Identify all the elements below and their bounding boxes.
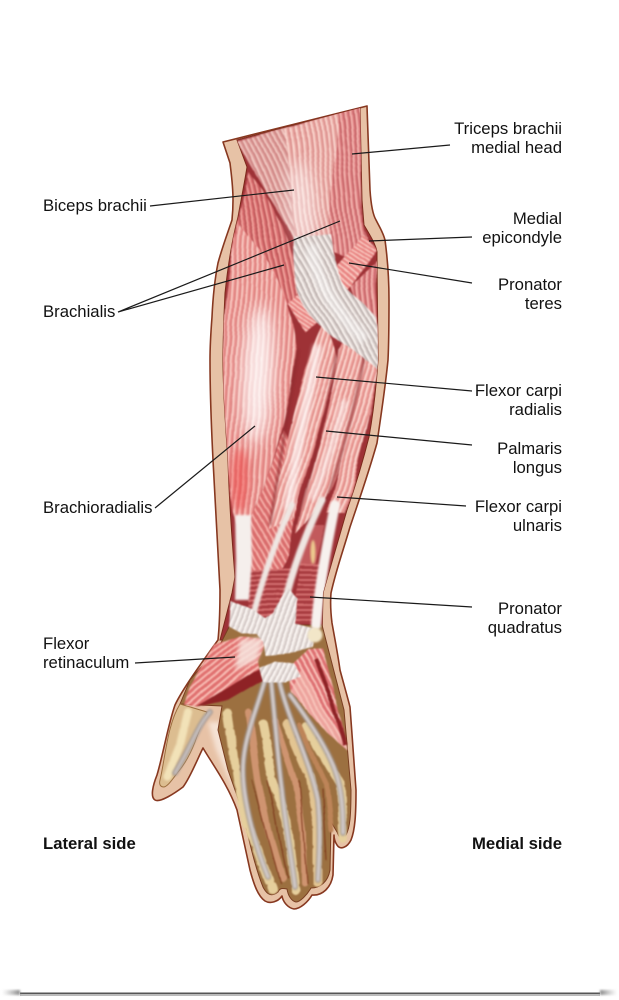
brachioradialis highlight [239,304,277,446]
muscle: flexor carpi radialis [268,318,338,530]
label: Pronator quadratus: Pronator [498,599,562,618]
muscle: palmaris longus [296,330,366,535]
muscle: brachioradialis [222,225,295,526]
label: Medial epicondyle: Medial [513,209,562,228]
label: Flexor carpi radialis: radialis [509,400,562,419]
leader line: biceps brachii [150,190,294,206]
label: Pronator teres: teres [525,294,562,313]
muscle: triceps brachii medial head [326,105,368,258]
brachioradialis red belly [231,448,249,512]
label: Brachialis: Brachialis [43,302,115,321]
label: Lateral side: Lateral side [43,834,136,853]
label: Triceps brachii medial head: medial head [471,138,562,157]
flexor highlights [288,345,318,510]
leader line: pronator quadratus [310,597,472,607]
muscle: deep layer and pronator quadratus [245,430,326,625]
leader line: triceps brachii [352,145,450,154]
label: Pronator quadratus: quadratus [488,618,562,637]
retinaculum highlight [235,637,265,670]
leader line: pronator teres [349,263,472,283]
thumb bones [166,712,188,780]
muscle: hypothenar group [287,650,347,750]
label: Flexor carpi ulnaris: ulnaris [513,516,562,535]
muscle: brachialis [228,172,300,305]
label: Pronator teres: Pronator [498,275,562,294]
biceps tendon [293,234,382,374]
brachioradialis tendon [235,515,252,600]
label: Medial epicondyle: epicondyle [482,228,562,247]
finger tendons [175,680,343,887]
label: Triceps brachii medial head: Triceps brachii [454,119,562,138]
arm and hand illustration [152,105,389,909]
biceps highlight [284,159,320,251]
label: Brachioradialis: Brachioradialis [43,498,152,517]
bottom edge shadow [2,990,617,996]
yellow fat spot [310,540,316,564]
pisiform bone [308,628,322,642]
palm web highlight [208,722,236,795]
muscle: pronator teres [288,234,378,332]
leader line: flexor retinaculum [135,657,235,663]
hand interior [180,625,351,902]
forearm deep tissue [220,108,378,640]
tendon highlight [312,245,365,340]
muscle: flexor carpi ulnaris [328,320,380,512]
label: Flexor retinaculum: Flexor [43,634,90,653]
leader line: palmaris longus [326,431,472,445]
muscle separations [270,345,366,525]
label: Biceps brachii: Biceps brachii [43,196,147,215]
label: Flexor carpi radialis: Flexor carpi [475,381,562,400]
muscle: thenar group with flexor retinaculum [185,635,265,707]
leader line: medial epicondyle [369,237,472,241]
label: Palmaris longus: Palmaris [497,439,562,458]
wrist retinaculum and aponeurosis [228,590,315,681]
thumb interior [160,704,207,787]
label: Flexor carpi ulnaris: Flexor carpi [475,497,562,516]
leader lines: brachialis [118,221,340,312]
label: Medial side: Medial side [472,834,562,853]
forearm muscles [222,105,382,625]
label: Flexor retinaculum: retinaculum [43,653,129,672]
leader line: brachioradialis [155,426,255,508]
forearm tendons [254,500,335,625]
leader line: flexor carpi ulnaris [337,497,466,506]
muscle: biceps brachii [237,113,338,250]
hand bones [228,712,343,892]
leader line: flexor carpi radialis [316,377,472,391]
label: Palmaris longus: longus [513,458,562,477]
skin silhouette [152,106,389,909]
